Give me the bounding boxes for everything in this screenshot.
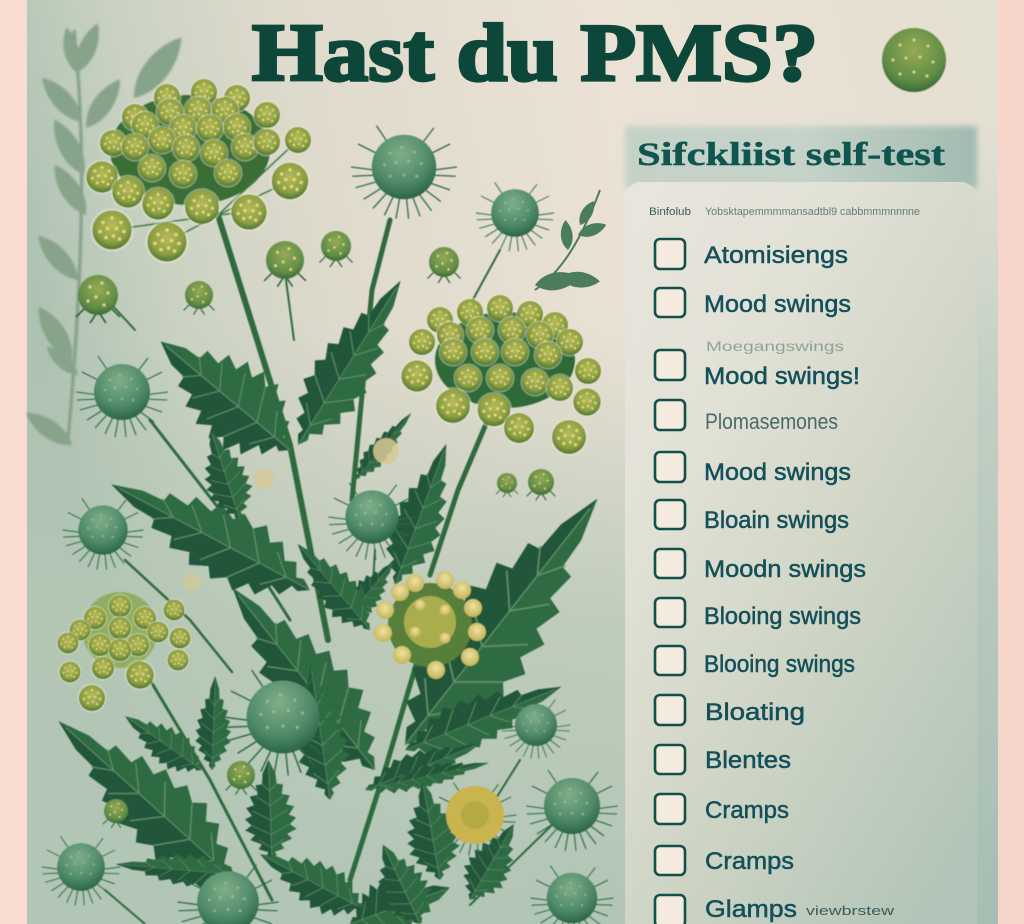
item 11 — [655, 745, 791, 774]
item 12 — [655, 794, 789, 824]
panel: checklist — [625, 182, 977, 924]
item 1: Atomisiengs — [704, 242, 848, 269]
item 11: Blentes — [705, 747, 791, 774]
icon: thistle corner decoration — [882, 28, 946, 92]
flowers: thistle heads — [42, 126, 618, 924]
item 7 — [655, 549, 866, 583]
flower: yellow thistle — [434, 783, 516, 856]
leaves — [33, 265, 638, 924]
checklist header: Yobsktapemmmmansadtbl9 cabbmmmnnnne — [705, 206, 920, 218]
item 3 — [655, 350, 860, 390]
flowers: small buds — [76, 231, 555, 828]
item 14 — [655, 895, 895, 924]
flower: top umbel — [85, 78, 312, 264]
item 10: Bloating — [705, 699, 805, 726]
item 2 — [655, 288, 851, 318]
item 14: viewbrstew — [806, 903, 895, 918]
item 10 — [655, 695, 805, 726]
item 7: Moodn swings — [704, 556, 866, 583]
stems — [105, 215, 552, 924]
item 1 — [655, 239, 848, 269]
background sprig — [21, 20, 191, 452]
item 4 — [655, 400, 838, 434]
illustration: botanical plant — [33, 78, 638, 924]
faint text: Moegangswings — [706, 338, 844, 354]
right page strip — [998, 0, 1024, 924]
checklist header: Binfolub — [649, 206, 691, 218]
item 13 — [655, 846, 794, 875]
item 14: Glamps — [705, 896, 797, 923]
title: Hast du PMS? — [252, 7, 818, 98]
item 8 — [655, 598, 861, 630]
item 13: Cramps — [705, 848, 794, 875]
item 4: Plomasemones — [705, 409, 838, 434]
sprig: right of thistle — [533, 190, 608, 294]
subtitle band — [625, 126, 977, 188]
item 3: Mood swings! — [704, 363, 860, 390]
item 5: Mood swings — [704, 459, 851, 486]
item 6 — [655, 500, 849, 534]
item 2: Mood swings — [704, 291, 851, 318]
subtitle: Sifckliist self-test — [637, 137, 945, 173]
flower: left umbel — [56, 592, 192, 712]
item 6: Bloain swings — [704, 507, 849, 534]
item 9 — [655, 646, 855, 678]
item 12: Cramps — [705, 797, 789, 824]
flower: yellow umbel — [374, 571, 486, 679]
item 5 — [655, 452, 851, 486]
item 9: Blooing swings — [704, 651, 855, 678]
flower: right umbel — [400, 294, 602, 456]
item 8: Blooing swings — [704, 603, 861, 630]
